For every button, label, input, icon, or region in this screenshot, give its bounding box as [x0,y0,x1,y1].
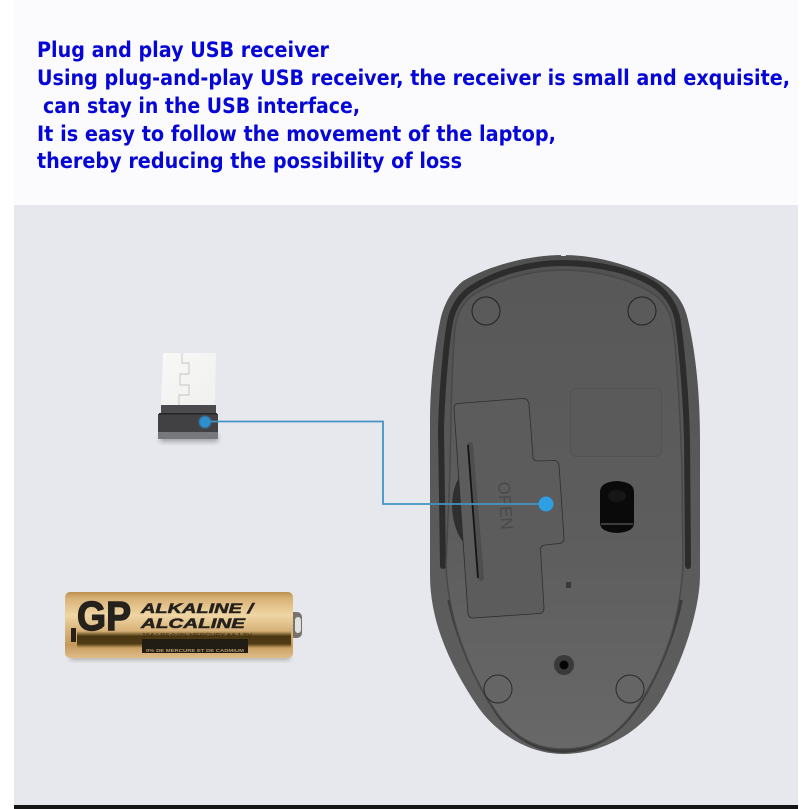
mouse marker [538,496,554,512]
GP logo: GP [77,593,131,639]
USB receiver [158,353,218,442]
alcaline label: ALCALINE [140,615,246,631]
metal seam [179,353,189,405]
battery shadow [70,655,290,660]
bottom black bar [14,805,798,809]
receiver lower body [158,431,218,439]
heading and description text [37,38,790,173]
connector line from receiver to mouse compartment [199,416,554,512]
battery left marking [71,628,76,642]
receiver main body [158,414,218,432]
foot bottom left [484,675,512,703]
receiver shadow [160,435,218,442]
small mark [566,582,571,588]
dark side wheel recess [452,473,463,542]
battery spec text: 15A LR6 0.0% MERCURY AA 1.5V [142,633,252,639]
connector path [205,422,546,504]
description line 3: It is easy to follow the movement of the laptop, [37,122,556,146]
foot top right [628,297,656,325]
battery [65,592,302,660]
alkaline label: ALKALINE / [140,600,256,616]
description line 4: thereby reducing the possibility of loss [37,149,462,173]
battery body [65,592,293,658]
battery hatch [454,398,564,618]
foot top left [472,297,500,325]
lower dark rim [449,600,681,751]
battery dark band [77,631,291,648]
bottom plate [446,270,683,749]
description line 2: can stay in the USB interface, [43,94,360,118]
top notch [561,254,566,256]
inner groove [441,263,688,566]
sensor lens detail [608,490,626,502]
product photo panel background [14,205,798,805]
sensor slot [600,481,634,533]
receiver collar [161,405,216,414]
receiver marker [199,416,211,428]
battery positive nub [289,612,302,638]
body divider [159,413,217,414]
mercury notice: 0% DE MERCURE ET DE CADMIUM [146,648,244,653]
heading: Plug and play USB receiver [37,38,330,62]
hatch embossed brand: OPEN [494,481,516,530]
mouse outer shell [430,255,700,754]
faint label area [570,388,662,456]
top text panel background [14,0,798,205]
screw hole [554,655,574,675]
metal connector [161,353,216,405]
sensor ledge [601,523,633,525]
mouse underside [430,254,700,754]
hatch slit surround [470,445,481,578]
mercury notice [142,639,248,653]
hatch slit [468,445,478,578]
foot bottom right [616,675,644,703]
